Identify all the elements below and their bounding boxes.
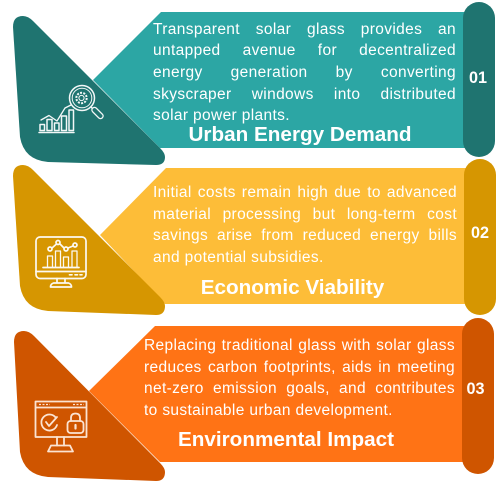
- icon: monitor with chart: [36, 237, 86, 287]
- text block: economic viability: savings arise from reduced energy bills: [153, 227, 457, 244]
- heading: urban energy demand: Urban Energy Demand: [188, 123, 412, 146]
- text block: economic viability: [153, 184, 457, 266]
- text block: economic viability: material processing but long-term cost: [153, 206, 457, 223]
- text block: urban energy demand: solar power plants.: [153, 107, 290, 124]
- panel: economic viability background: [100, 168, 466, 304]
- icon: monitor with check and padlock: [36, 402, 86, 452]
- text block: environmental impact: net-zero emission goals, and contributes: [144, 380, 455, 397]
- number 01: 01: [469, 68, 487, 86]
- triangle: urban energy demand: [13, 16, 165, 165]
- text block: economic viability: Initial costs remain high due to advanced: [153, 184, 457, 201]
- heading: economic viability: Economic Viability: [201, 276, 384, 299]
- heading: environmental impact: Environmental Impact: [178, 428, 394, 451]
- text block: environmental impact: reduces carbon footprints, aids in meeting: [144, 359, 455, 376]
- text block: economic viability: and potential subsidies.: [153, 249, 324, 266]
- panel: environmental impact background: [89, 326, 464, 462]
- triangle: economic viability: [13, 165, 165, 315]
- number pill 01: [463, 2, 495, 157]
- number 02: 02: [471, 224, 489, 242]
- number 03: 03: [466, 380, 484, 398]
- text block: environmental impact: Replacing traditional glass with solar glass: [144, 337, 455, 354]
- number pill 03: [462, 318, 494, 474]
- text block: urban energy demand: Transparent solar glass provides an: [153, 20, 456, 38]
- text block: urban energy demand: [153, 20, 456, 124]
- triangle: environmental impact: [14, 331, 165, 481]
- text block: environmental impact: to sustainable urban development.: [144, 402, 393, 419]
- panel: urban energy demand background: [93, 12, 465, 148]
- icon: magnifier over bar chart: [39, 86, 100, 132]
- text block: environmental impact: [144, 337, 455, 419]
- number pill 02: [464, 159, 496, 315]
- text block: urban energy demand: skyscraper windows into distributed: [153, 86, 456, 103]
- text block: urban energy demand: untapped avenue for decentralized: [153, 42, 456, 59]
- text block: urban energy demand: energy generation by converting: [153, 64, 456, 81]
